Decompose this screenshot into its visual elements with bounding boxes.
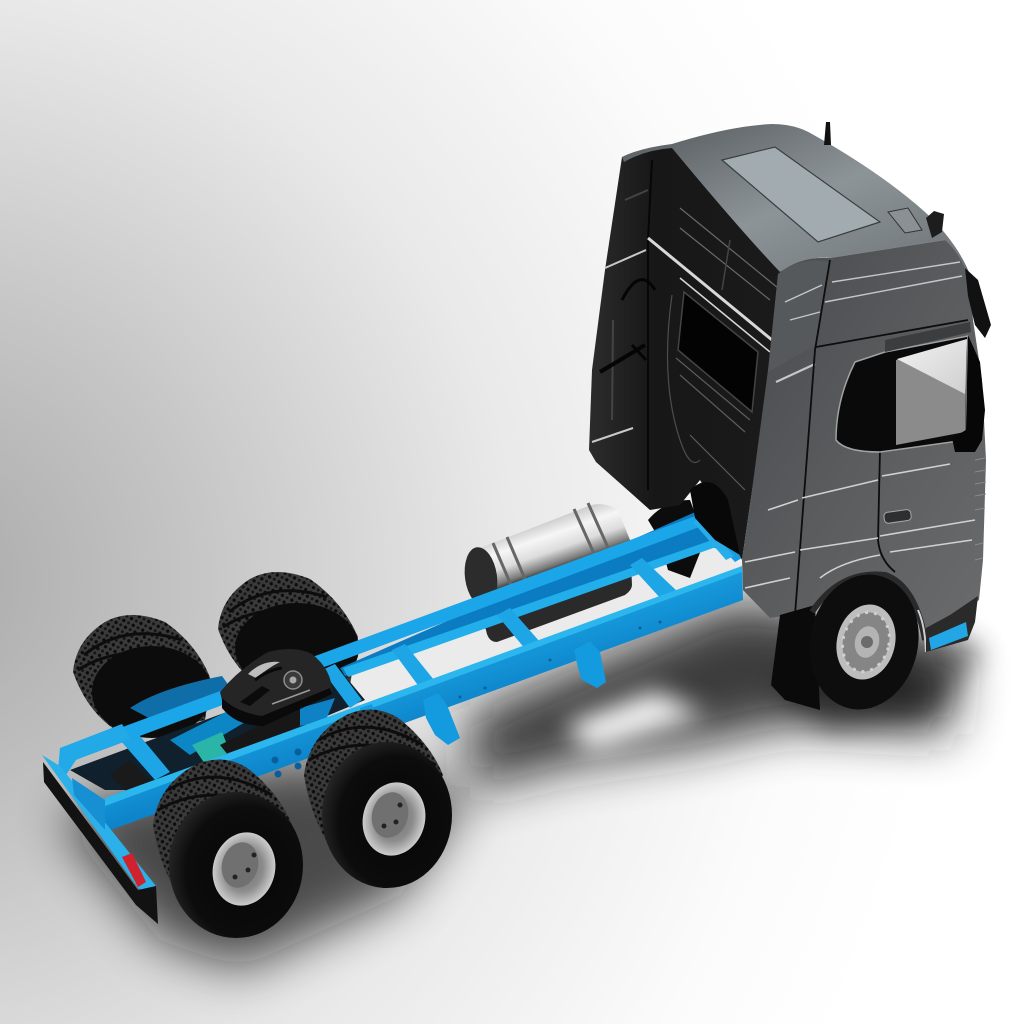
cab sleeper rear and side xyxy=(589,145,808,560)
frame cross members xyxy=(120,518,734,780)
cab xyxy=(589,122,991,650)
sun roof panel xyxy=(722,147,880,242)
roof marker xyxy=(888,208,922,233)
roof side mirror xyxy=(926,211,944,238)
window glass xyxy=(896,340,967,445)
ground shadows xyxy=(60,600,985,968)
far rear wheels xyxy=(73,572,359,738)
door handle xyxy=(883,509,912,524)
frame far rail xyxy=(60,505,742,765)
frame near rail xyxy=(105,566,743,832)
hub left xyxy=(204,825,284,913)
front mudguard xyxy=(771,605,820,710)
front grille edge xyxy=(975,458,986,560)
hub xyxy=(829,598,903,686)
sleeper white stripes xyxy=(648,208,778,490)
far left wheel xyxy=(73,615,212,738)
front wheel xyxy=(771,564,931,720)
far right wheel xyxy=(218,572,359,695)
light floor between rails xyxy=(340,545,742,706)
upper cab highlights xyxy=(776,262,962,382)
rear cross bar xyxy=(42,724,156,895)
antenna xyxy=(824,122,831,145)
cab window frame xyxy=(836,336,968,452)
rear mudflap and red reflector xyxy=(43,762,158,924)
tyre xyxy=(797,564,931,720)
black suspension parts behind cab xyxy=(648,500,705,578)
sleeper window xyxy=(678,292,758,412)
front step xyxy=(926,596,978,652)
rear wall seam and stripes xyxy=(592,160,655,490)
fuel tank xyxy=(461,503,632,642)
window visor strip xyxy=(885,322,971,352)
near rear wheel left xyxy=(153,760,303,938)
fifth wheel coupling xyxy=(220,649,332,726)
exterior mirror xyxy=(952,335,985,452)
roof xyxy=(622,124,972,280)
rear axle internals xyxy=(70,670,365,800)
top mirror and visor xyxy=(965,268,991,338)
hub right xyxy=(354,775,434,863)
cab grey side xyxy=(742,240,986,650)
wheel well opening xyxy=(690,482,740,555)
frame brackets xyxy=(358,641,606,745)
near rear wheel right xyxy=(304,710,452,888)
side body lines xyxy=(745,464,975,588)
cab seams xyxy=(795,260,968,615)
corner fairing xyxy=(768,260,830,372)
wheel arch trim xyxy=(812,574,925,640)
